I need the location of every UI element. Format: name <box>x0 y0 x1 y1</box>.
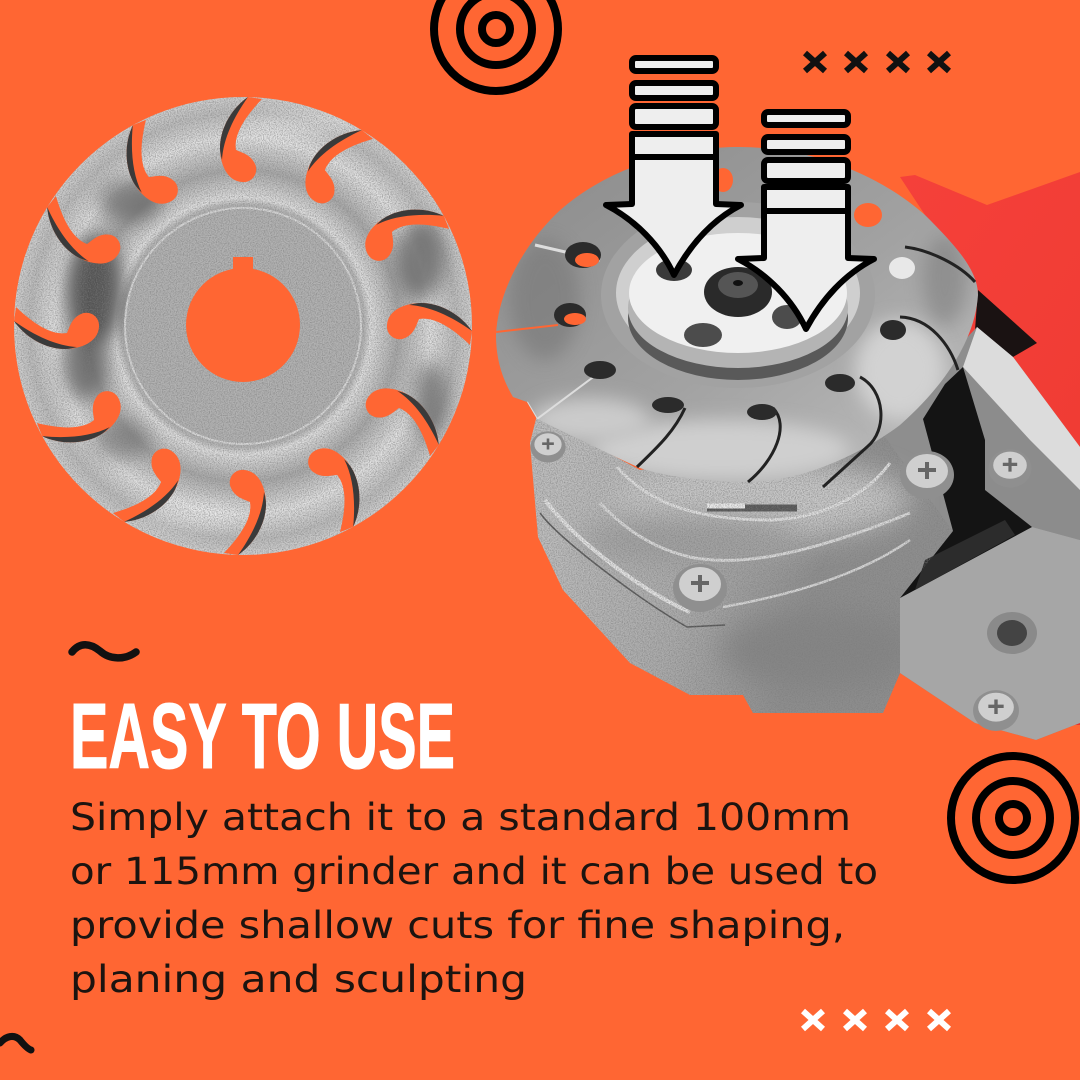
icon: black crosses top <box>805 53 949 71</box>
flange <box>601 202 875 388</box>
casting shading <box>584 454 1080 740</box>
arbor hole with keyway <box>186 257 300 382</box>
wheel slits <box>637 247 975 487</box>
icon: concentric circles bottom right <box>951 756 1075 880</box>
body text: or 115mm grinder and it can be used to <box>70 850 878 893</box>
threaded hole <box>987 612 1037 654</box>
icon: squiggle bottom left <box>0 1036 31 1050</box>
icon: concentric circles top <box>434 0 558 91</box>
light housing edge <box>963 327 1080 490</box>
body text <box>70 796 878 1001</box>
flange holes <box>656 259 692 281</box>
heading: EASY TO USE <box>70 684 455 788</box>
wheel holes <box>554 242 906 420</box>
silver gear housing <box>530 327 1080 740</box>
body text: planing and sculpting <box>70 958 527 1001</box>
wheel <box>496 147 978 482</box>
product photo: cutting disc <box>14 97 472 555</box>
cutting slots <box>14 97 472 555</box>
spindle nut <box>704 267 772 317</box>
icon: white crosses bottom <box>803 1011 949 1029</box>
dark recess <box>900 367 1032 598</box>
ridges and seam <box>540 463 910 627</box>
arrow: left down arrow <box>606 58 741 275</box>
shadow notch <box>975 290 1037 357</box>
housing grain <box>530 415 953 713</box>
icon: squiggle above heading <box>72 645 136 658</box>
body text: provide shallow cuts for fine shaping, <box>70 904 845 947</box>
product photo: angle grinder with disc <box>496 147 1080 740</box>
red grinder housing <box>900 172 1080 447</box>
body text: Simply attach it to a standard 100mm <box>70 796 851 839</box>
screws <box>900 451 954 499</box>
center plate <box>125 208 361 444</box>
arrow: right down arrow <box>738 112 874 329</box>
